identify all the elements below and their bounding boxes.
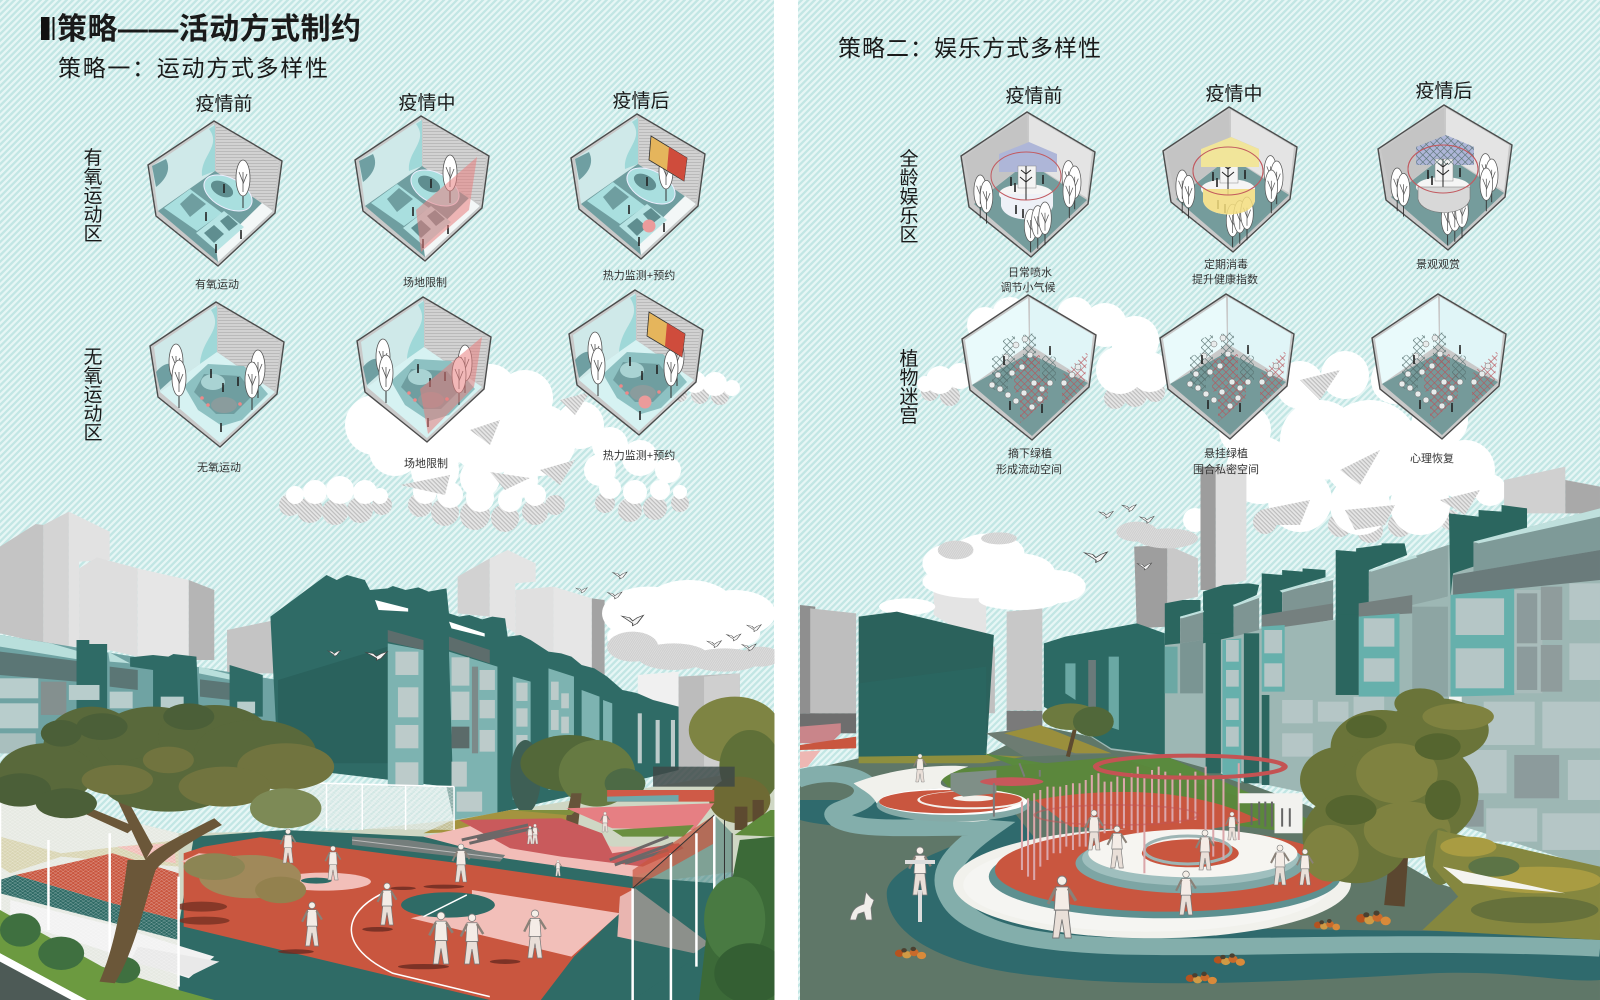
clouds: right upper cloud [917,297,1506,543]
captions: left panel: 有氧运动 [195,277,239,291]
captions: right panel: 摘下绿植 [1008,446,1052,460]
headers: phases [1005,80,1473,107]
row label: all-age: 龄 [899,167,919,189]
far trees [505,697,781,840]
captions: left panel: 热力监测+预约 [603,269,675,282]
row label: anaerobic [83,347,103,444]
main circular plaza [953,792,1351,938]
diagram: aerobic during [355,116,489,261]
scene: community playground [795,467,1600,1000]
street facade [1044,505,1600,870]
captions: left panel: 场地限制 [403,275,447,289]
background towers [800,467,1600,733]
captions: right panel: 定期消毒 [1204,257,1248,271]
left fenced court [0,790,219,990]
row label: anaerobic: 无 [83,347,103,368]
court base teal [179,830,714,1000]
main dark building [270,575,679,822]
clouds: left upper cloud [279,364,740,532]
row label: anaerobic: 区 [83,423,103,444]
row label: aerobic: 运 [83,186,103,207]
diagram: maze before [962,295,1096,440]
headers: phases: 疫情中 [1205,83,1263,105]
dark teal walkway [800,800,1600,983]
small cloud left [879,522,1198,615]
captions: left panel: 场地限制 [404,456,448,470]
diagram: anaerobic after [569,290,703,435]
white chain-link fence [260,782,454,830]
upper pink and red deck [423,818,684,877]
light teal band [795,774,1600,948]
scene: basketball court and residential street [0,512,786,1000]
title: strategy heading: 策略——活动方式制约 [57,13,361,46]
row label: aerobic [83,147,103,245]
headers: phases: 疫情前 [1005,85,1063,107]
background towers [0,512,740,767]
panel: right strategy [795,0,1600,1000]
row label: all-age: 全 [899,148,919,170]
captions: right panel: 心理恢复 [1410,451,1454,465]
captions: right panel: 调节小气候 [1000,280,1056,294]
headers: phases: 疫情前 [195,93,253,115]
captions: right panel: 形成流动空间 [996,462,1062,476]
small cloud right [602,580,781,672]
captions: right panel: 景观观赏 [1416,258,1460,271]
big foreground tree [0,703,334,983]
diagram: anaerobic during [357,297,491,442]
row label: anaerobic: 氧 [83,365,103,387]
subtitle: strategy two: 策略二：娱乐方式多样性 [838,35,1101,61]
headers: phases: 疫情后 [612,90,670,112]
row label: plant maze: 宫 [899,405,919,427]
row label: all-age: 区 [899,225,919,246]
diagram: all-age after [1378,105,1512,250]
ground [800,727,1600,1000]
captions: left panel [195,269,675,474]
bleachers and tables [352,825,673,865]
captions: right panel: 悬挂绿植 [1204,446,1248,460]
grass and road [0,910,214,1000]
right planting beds [1422,830,1600,940]
right sports-court fence [633,815,732,1000]
canopy backdrop [116,786,774,920]
leaf piles [895,910,1391,984]
row label: aerobic: 有 [83,147,103,169]
diagram: anaerobic before [150,302,284,447]
captions: right panel [996,257,1460,476]
left sky background [0,0,774,1000]
row label: anaerobic: 运 [83,385,103,406]
row label: plant maze: 迷 [899,386,919,408]
headers: phases [195,90,670,115]
right sky background [798,0,1600,1000]
captions: right panel: 围合私密空间 [1193,462,1259,476]
shrubs in far garden [859,703,1310,820]
sculptural ring and poles [1022,756,1303,880]
captions: left panel: 无氧运动 [197,460,241,474]
row label: aerobic: 动 [83,204,103,226]
far gable wall [859,612,994,760]
subtitle: strategy one: 策略一：运动方式多样性 [58,55,328,81]
captions: right panel: 日常喷水 [1008,266,1052,279]
diagram: aerobic after [571,114,705,259]
panel: left strategy [0,0,786,1000]
figures: basketball players [280,812,610,964]
row label: aerobic: 氧 [83,166,103,188]
row label: plant maze [899,348,919,427]
diagram: maze after [1372,294,1506,439]
diagram: all-age during [1163,107,1297,252]
headers: phases: 疫情后 [1415,80,1473,102]
captions: right panel: 提升健康指数 [1192,272,1258,286]
row label: anaerobic: 动 [83,403,103,425]
row label: all-age: 乐 [899,205,919,227]
row label: all-age [899,148,919,246]
lawn strip [933,757,1310,833]
row label: plant maze: 物 [899,367,919,389]
row label: aerobic: 区 [83,224,103,245]
headers: phases: 疫情中 [398,92,456,114]
row label: plant maze: 植 [899,348,919,370]
small plaza [854,763,1043,822]
birds [576,572,761,651]
row label: all-age: 娱 [899,186,919,208]
big tree [1300,688,1494,907]
low residential row [0,635,278,753]
main red basketball court [176,837,709,1000]
birds [1084,505,1154,570]
diagram: aerobic before [148,121,282,266]
figures: children and cyclist [850,754,1313,938]
right hedge [699,836,774,1000]
left far deck [800,723,856,768]
captions: left panel: 热力监测+预约 [603,449,675,462]
diagram: maze during [1160,294,1294,439]
far courts [423,790,714,837]
diagram: all-age before [961,112,1095,257]
